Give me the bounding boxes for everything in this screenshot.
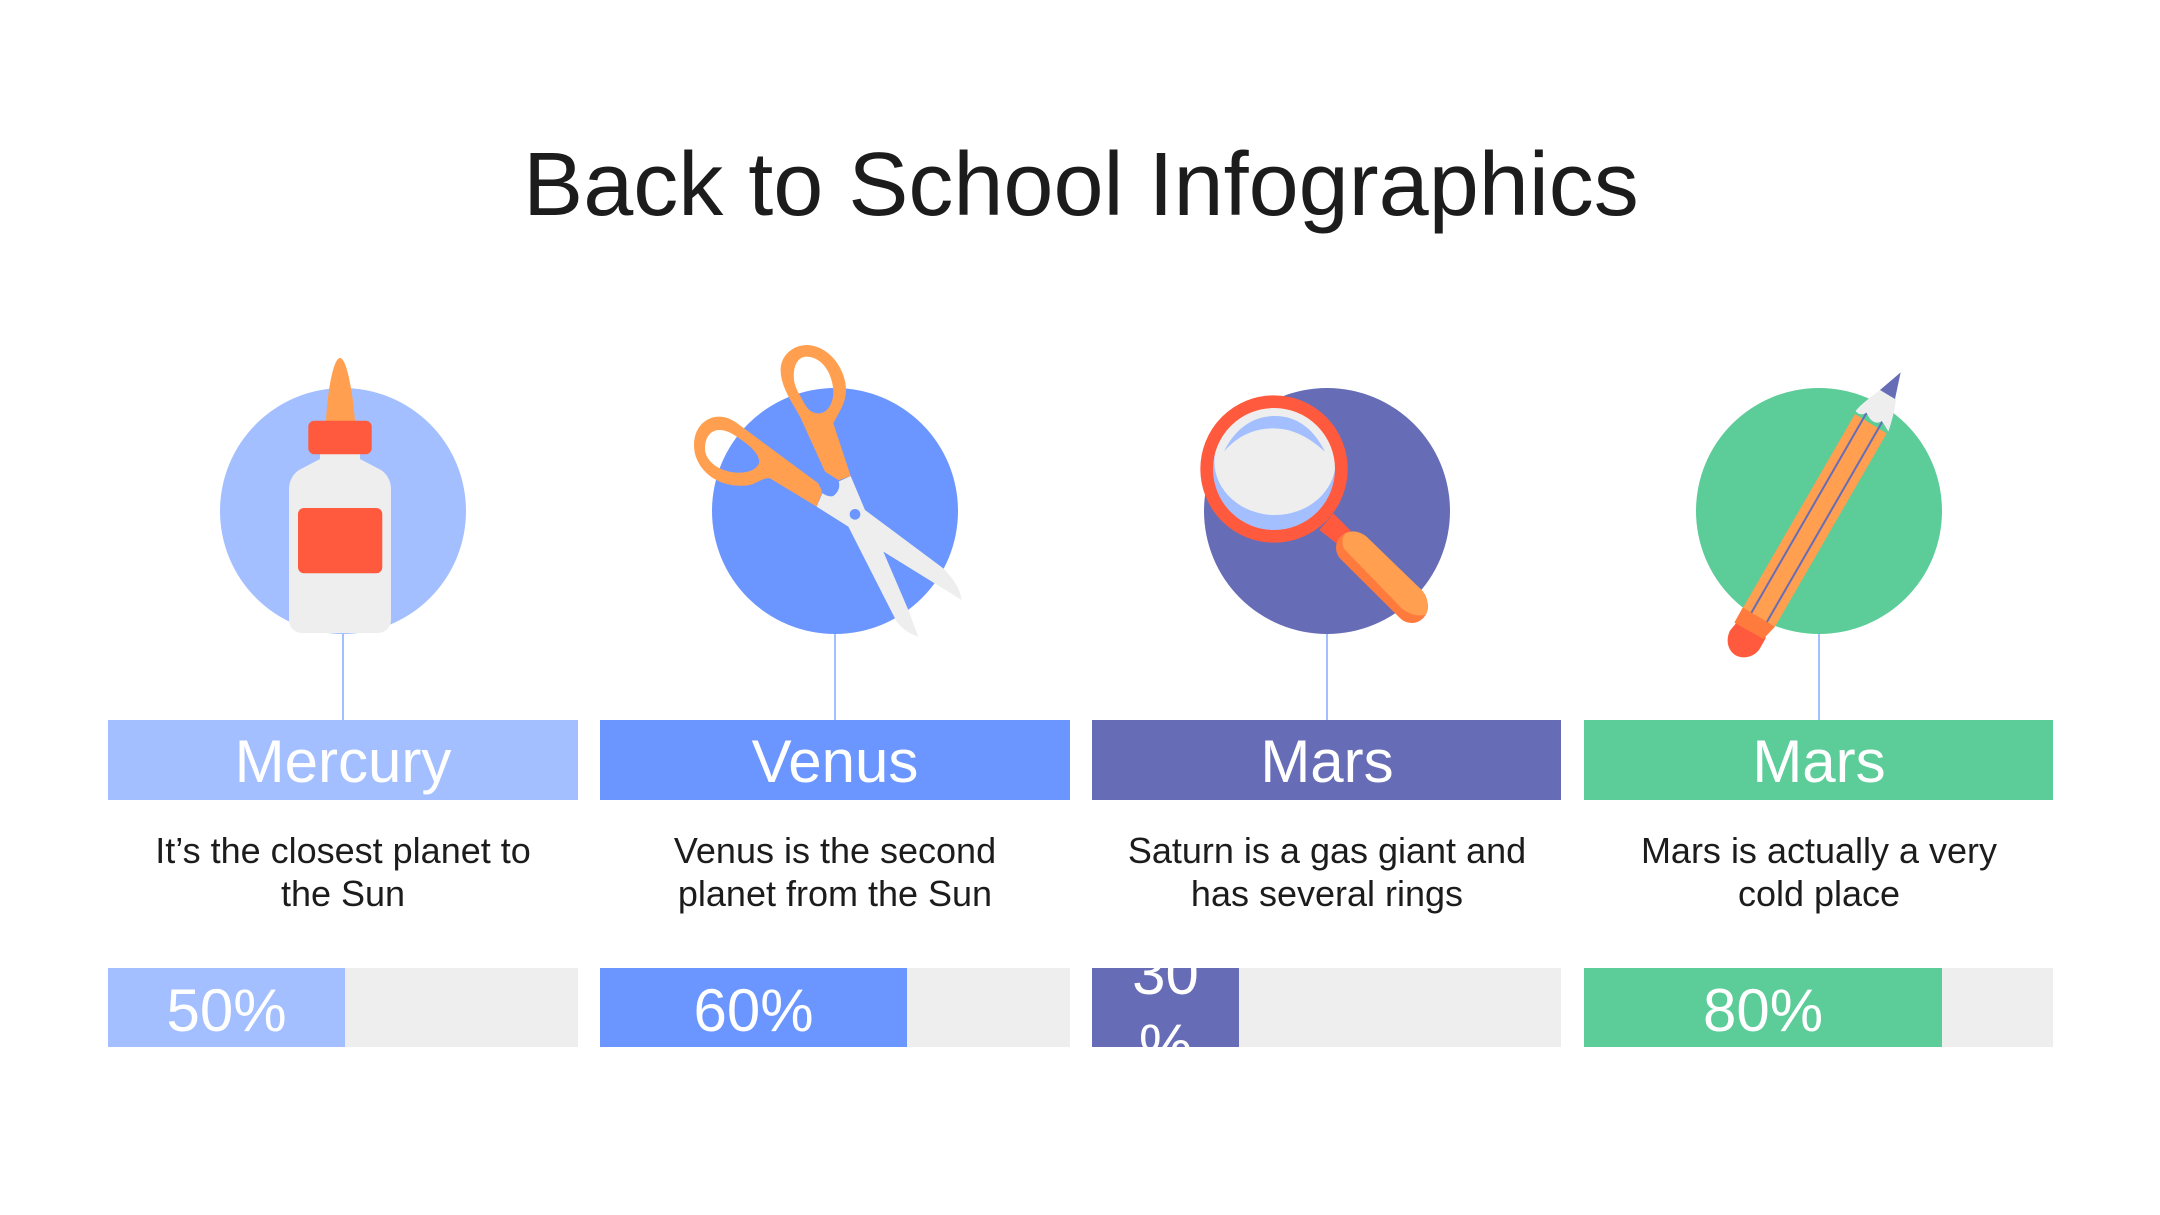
- icon: glue bottle: [289, 358, 391, 633]
- header: Mars 1: Mars: [1260, 728, 1394, 795]
- text: Mercury description: [155, 830, 531, 914]
- text: Saturn description: has several rings: [1191, 872, 1463, 914]
- connector: Mars 1: [1326, 630, 1328, 720]
- progress fill: 80%: 80%: [1703, 977, 1823, 1044]
- icon: scissors: [694, 345, 962, 637]
- progress bar: 60%: [600, 968, 1070, 1047]
- text: Venus description: Venus is the second: [674, 830, 996, 871]
- header: Venus: Venus: [752, 728, 918, 795]
- text: Mars description: Mars is actually a very: [1641, 830, 1997, 871]
- text: Mars description: [1641, 830, 1997, 914]
- title: Back to School Infographics: [523, 135, 1639, 235]
- circle: Mercury: [220, 388, 466, 634]
- progress fill: 60%: 60%: [693, 977, 814, 1044]
- text: Saturn description: Saturn is a gas giant and: [1128, 830, 1526, 871]
- progress bar: 50%: [108, 968, 578, 1047]
- header: Mercury: Mercury: [235, 728, 451, 795]
- text: Mercury description: It’s the closest planet to: [155, 830, 531, 871]
- progress fill: 50%: 50%: [166, 977, 287, 1044]
- text: Saturn description: [1128, 830, 1526, 914]
- header: Mercury: [108, 720, 578, 800]
- progress bar: 80%: [1584, 968, 2053, 1047]
- circle: Venus: [712, 388, 958, 634]
- header: Venus: [600, 720, 1070, 800]
- progress fill: 30%: [1092, 968, 1239, 1047]
- text: Venus description: [674, 830, 996, 914]
- connector: Mercury: [342, 630, 344, 720]
- circle: Mars 1: [1204, 388, 1450, 634]
- text: Mercury description: the Sun: [281, 872, 405, 914]
- icon: magnifying glass: [1207, 402, 1428, 615]
- header: Mars 2: [1584, 720, 2053, 800]
- text: Mars description: cold place: [1738, 872, 1900, 914]
- header: Mars 1: [1092, 720, 1561, 800]
- connector: Venus: [834, 630, 836, 720]
- connector: Mars 2: [1818, 630, 1820, 720]
- progress fill: 50%: [108, 968, 345, 1047]
- progress bar: 30%: [1092, 968, 1561, 1047]
- circle: Mars 2: [1696, 388, 1942, 634]
- icon: pencil: [1728, 372, 1901, 657]
- header: Mars 2: Mars: [1752, 728, 1886, 795]
- progress fill: 80%: [1584, 968, 1942, 1047]
- text: Venus description: planet from the Sun: [678, 872, 992, 914]
- progress fill: 60%: [600, 968, 907, 1047]
